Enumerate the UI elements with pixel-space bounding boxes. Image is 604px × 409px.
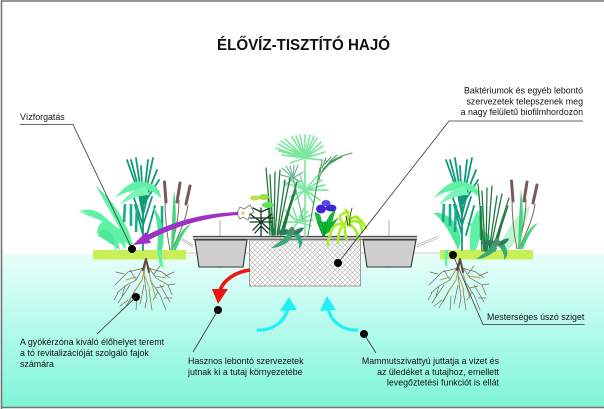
white flower [237,205,254,220]
plants: right island [433,158,538,268]
callout: mammoth pump: az üledéket a tutajhoz, emellett [377,367,500,377]
arrow: cyan uplift right [320,296,358,330]
callout: artificial floating island: Mesterséges úszó sziget [487,312,585,322]
floating island left [93,250,186,260]
roots: right [428,259,489,310]
plants: left island [79,158,191,268]
callout: root zone [20,293,165,369]
pontoon left [195,240,247,267]
callout: root zone: a tó revitalizációját szolgáló fajok [20,348,149,358]
roots: left [114,259,175,310]
dark green flowering plant [250,194,274,236]
callout: root zone: A gyökérzóna kiváló élőhelyet teremt [20,337,165,347]
iris [315,200,338,236]
callout: artificial floating island [449,251,585,324]
arrow: cyan uplift left [257,297,297,330]
callout: water circulation [20,112,136,253]
callout: biofilm bacteria: Baktériumok és egyéb lebontó [464,86,583,96]
deck bar [193,236,417,239]
callout: biofilm bacteria [334,86,583,267]
callout: biofilm bacteria: szervezetek telepszenek meg [466,96,583,106]
central rosette [271,227,304,249]
central palm [276,135,352,236]
mooring lines [178,220,440,268]
callout: water circulation: Vízforgatás [20,112,65,122]
pontoon right [363,240,416,267]
water body [2,254,604,407]
biofilm carrier cage [250,240,360,286]
title: ÉLŐVÍZ-TISZTÍTÓ HAJÓ [217,35,390,54]
floating island right [440,250,533,260]
central reeds [266,168,297,235]
callout: mammoth pump: levegőztetési funkciót is ellát [387,378,500,388]
callout: useful decomposers [187,306,304,377]
callout: useful decomposers: Hasznos lebontó szervezetek [188,356,304,366]
callout: mammoth pump: Mammutszivattyú juttatja a vizet és [362,356,500,366]
arrow: purple circulation [133,212,238,245]
bright fern [328,208,366,245]
arrow: red outflow [212,270,250,304]
callout: biofilm bacteria: a nagy felületű biofilmhordozón [461,107,583,117]
callout: useful decomposers: jutnak ki a tutaj környezetébe [187,367,303,377]
callout: root zone: számára [20,359,54,369]
callout: mammoth pump [360,330,500,388]
